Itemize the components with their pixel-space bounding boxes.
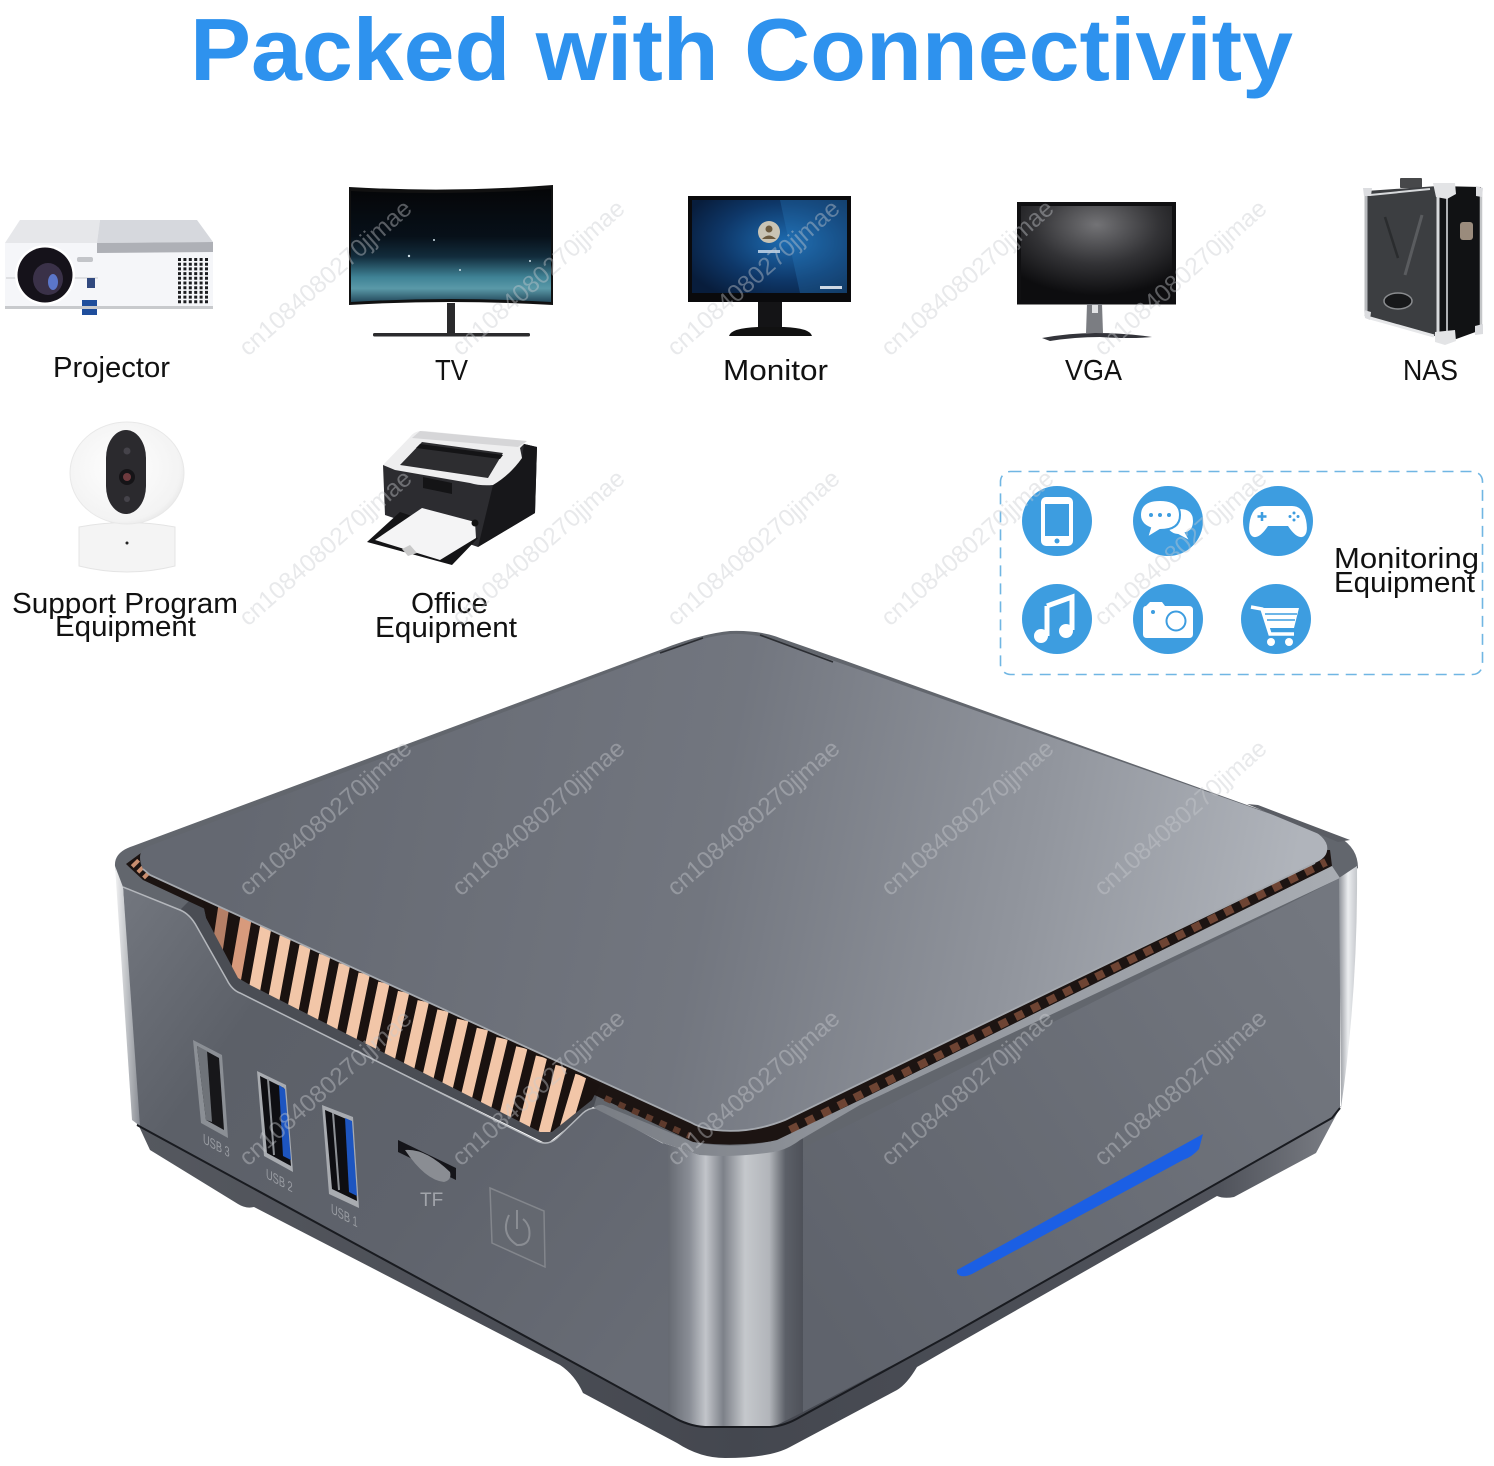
watermark grid: cn1084080270jjmae — [234, 195, 417, 361]
panel: monitoring equipment — [1000, 472, 1482, 674]
icon: projector — [5, 220, 213, 315]
watermark grid: cn1084080270jjmae — [876, 1005, 1059, 1171]
right side vent fins — [134, 862, 1326, 1136]
right edge highlight — [1339, 866, 1357, 1108]
title: Packed with Connectivity — [190, 0, 1293, 99]
port: TF slot: TF — [420, 1190, 443, 1211]
label: office equipment — [375, 588, 517, 644]
label: support program equipment — [12, 588, 238, 643]
watermark grid — [234, 195, 1272, 1171]
icon: music — [1022, 584, 1092, 654]
plate: top lid — [140, 634, 1327, 1131]
watermark grid: cn1084080270jjmae — [1089, 735, 1272, 901]
watermark grid: cn1084080270jjmae — [1089, 465, 1272, 631]
port: USB 2: USB 2 — [266, 1166, 293, 1196]
mini PC device — [115, 631, 1358, 1458]
bottom seam — [137, 1108, 1340, 1427]
port: USB 3: USB 3 — [203, 1131, 230, 1161]
port: USB 1 — [322, 1105, 359, 1231]
label: monitoring equipment: Monitoring — [1334, 543, 1479, 575]
icon: phone — [1022, 486, 1092, 556]
shell tab back right — [1247, 804, 1350, 842]
watermark grid: cn1084080270jjmae — [662, 735, 845, 901]
port: TF slot — [398, 1140, 456, 1211]
icon: monitor — [688, 196, 851, 336]
watermark grid: cn1084080270jjmae — [447, 465, 630, 631]
label: monitor: Monitor — [723, 355, 828, 387]
icon: TV — [349, 185, 553, 336]
port: USB 3 — [193, 1040, 230, 1161]
shell rim — [115, 631, 1358, 1156]
watermark grid: cn1084080270jjmae — [876, 735, 1059, 901]
watermark grid: cn1084080270jjmae — [234, 1005, 417, 1171]
label: VGA: VGA — [1065, 355, 1123, 387]
device base and feet — [137, 1106, 1341, 1458]
label: monitoring equipment — [1334, 543, 1479, 599]
icon: cart — [1241, 584, 1311, 654]
copper fins at notch — [204, 907, 594, 1132]
watermark grid: cn1084080270jjmae — [447, 1005, 630, 1171]
label: office equipment: Equipment — [375, 612, 517, 644]
watermark grid: cn1084080270jjmae — [876, 465, 1059, 631]
dark vent gap — [126, 850, 1332, 1145]
icon: camera — [1133, 584, 1203, 654]
watermark grid: cn1084080270jjmae — [662, 465, 845, 631]
watermark grid: cn1084080270jjmae — [1089, 1005, 1272, 1171]
top ridge — [594, 866, 1340, 1156]
label: office equipment: Office — [411, 588, 488, 620]
port: USB 1: USB 1 — [331, 1201, 358, 1231]
watermark grid: cn1084080270jjmae — [662, 195, 845, 361]
icon: NAS case — [1363, 178, 1483, 345]
label: NAS: NAS — [1403, 355, 1458, 387]
LED light bar — [957, 1134, 1203, 1276]
watermark grid: cn1084080270jjmae — [662, 1005, 845, 1171]
panel: right face — [803, 878, 1340, 1412]
icon: chat — [1133, 486, 1203, 556]
watermark grid: cn1084080270jjmae — [876, 195, 1059, 361]
icon: VGA monitor — [1017, 202, 1176, 341]
watermark grid: cn1084080270jjmae — [234, 465, 417, 631]
port: USB 2 — [257, 1071, 293, 1196]
left edge highlight — [115, 866, 140, 1126]
lip shadow lines — [660, 635, 833, 662]
watermark grid: cn1084080270jjmae — [234, 735, 417, 901]
panel: front face — [123, 887, 700, 1427]
watermark grid: cn1084080270jjmae — [1089, 195, 1272, 361]
icon: printer — [367, 431, 537, 565]
button: power — [490, 1188, 545, 1267]
watermark grid: cn1084080270jjmae — [447, 195, 630, 361]
label: monitoring equipment: Equipment — [1334, 567, 1475, 599]
icon: gamepad — [1243, 486, 1313, 556]
label: TV: TV — [435, 355, 469, 387]
notch band — [181, 890, 600, 1144]
panel: corner pillar — [668, 1138, 803, 1427]
icon: security camera — [70, 422, 184, 572]
watermark grid: cn1084080270jjmae — [447, 735, 630, 901]
label: projector: Projector — [53, 352, 170, 384]
label: support program equipment: Equipment — [55, 611, 196, 643]
label: support program equipment: Support Program — [12, 588, 238, 620]
